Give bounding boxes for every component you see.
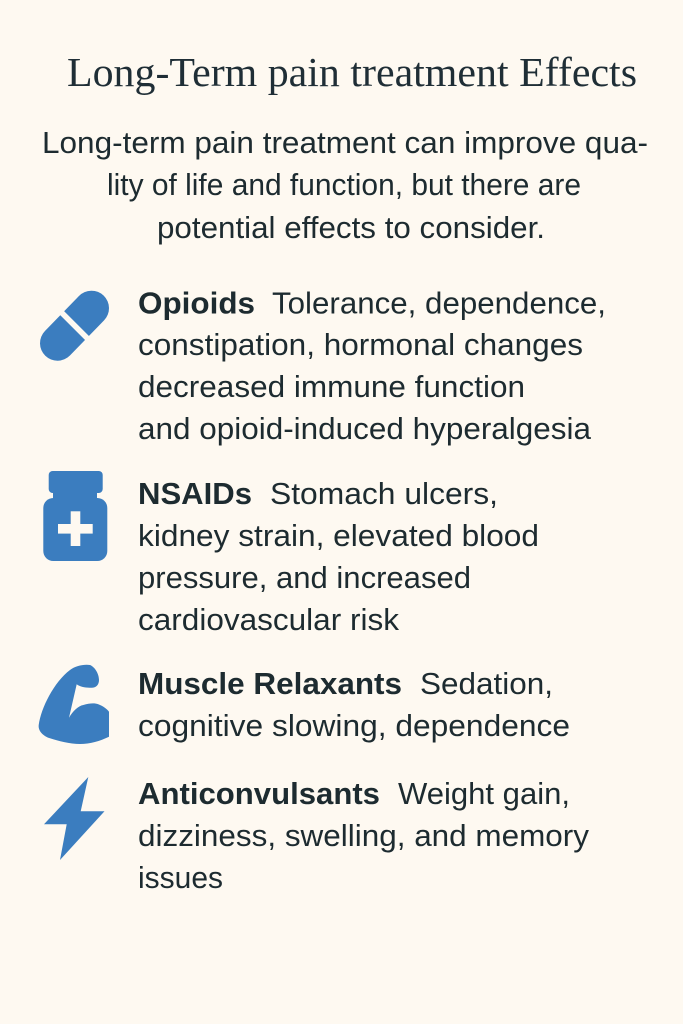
muscle relaxants text	[138, 666, 570, 743]
muscle relaxants text: Muscle Relaxants	[138, 666, 402, 701]
nsaids text	[138, 476, 539, 637]
panel: anticonvulsants	[44, 776, 589, 895]
opioids text	[138, 286, 606, 446]
icon: medicine bottle	[43, 471, 107, 561]
panel: opioids	[58, 286, 606, 446]
opioids text: Tolerance, dependence,	[272, 286, 606, 320]
panel: muscle relaxants	[39, 665, 570, 744]
nsaids text: Stomach ulcers,	[270, 476, 498, 511]
muscle relaxants text: Sedation,	[420, 666, 553, 701]
anticonvulsants text: dizziness, swelling, and memory	[138, 818, 589, 853]
anticonvulsants text: Anticonvulsants	[138, 776, 380, 811]
intro text: Long-term pain treatment can improve qua-	[42, 125, 648, 160]
icon: flexed arm	[39, 665, 109, 744]
nsaids text: cardiovascular risk	[138, 602, 399, 637]
intro text	[42, 125, 648, 245]
nsaids text: pressure, and increased	[138, 560, 471, 595]
intro text: lity of life and function, but there are	[107, 167, 581, 202]
anticonvulsants text	[138, 776, 589, 895]
muscle relaxants text: cognitive slowing, dependence	[138, 708, 570, 743]
opioids text: constipation, hormonal changes	[138, 327, 583, 362]
nsaids text: kidney strain, elevated blood	[138, 518, 539, 553]
opioids text: and opioid-induced hyperalgesia	[138, 411, 592, 446]
opioids text: decreased immune function	[138, 369, 525, 404]
icon: lightning bolt	[44, 777, 104, 860]
opioids text: Opioids	[138, 286, 255, 320]
nsaids text: NSAIDs	[138, 476, 252, 511]
title: Long-Term pain treatment Effects	[67, 49, 637, 95]
intro text: potential effects to consider.	[157, 210, 545, 245]
anticonvulsants text: issues	[138, 860, 223, 895]
panel: nsaids	[43, 471, 539, 637]
anticonvulsants text: Weight gain,	[398, 776, 570, 811]
icon: pill	[58, 308, 92, 343]
